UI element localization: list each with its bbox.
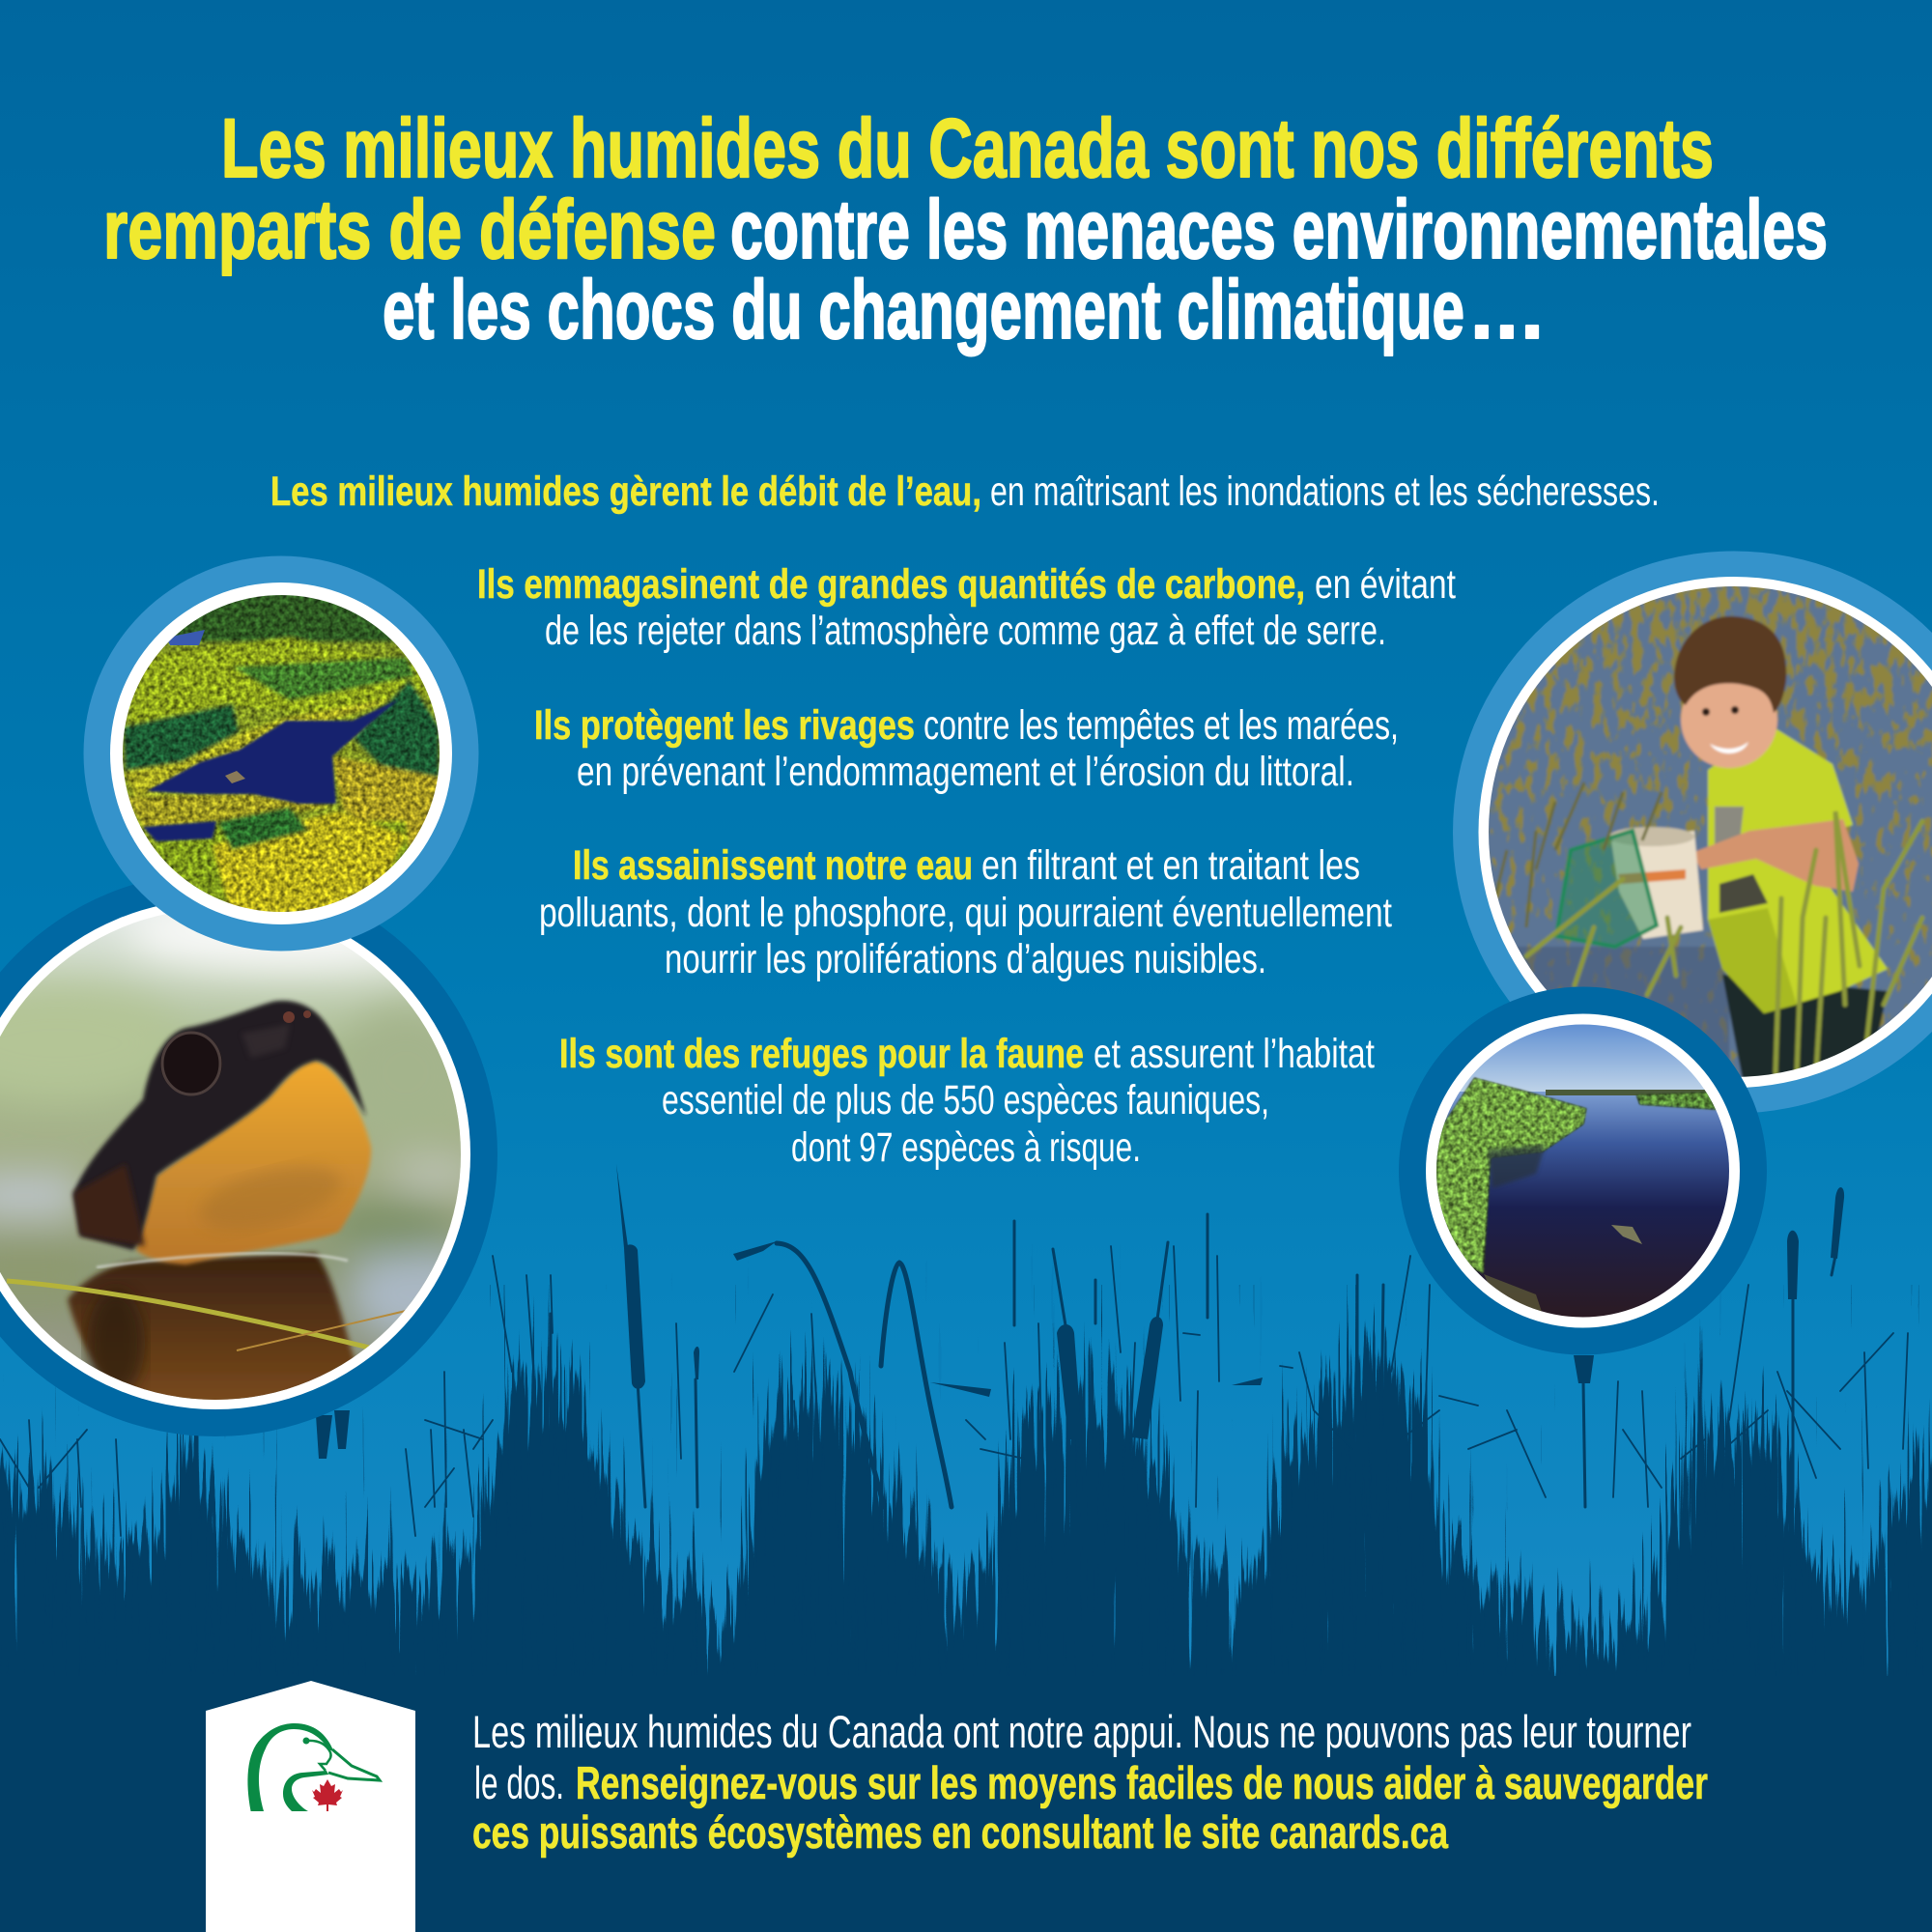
text: carbon — [477, 561, 1456, 654]
title — [103, 102, 1828, 356]
logo panel — [206, 1681, 415, 1932]
text: shorelines: contre les tempêtes et les marées, — [923, 702, 1399, 749]
text: clean water: nourrir les proliférations d’algues nuisibles. — [665, 936, 1266, 982]
arm — [1691, 819, 1859, 892]
bucket — [1611, 831, 1703, 939]
reflection — [68, 1253, 355, 1406]
footer call to action — [472, 1706, 1708, 1858]
water reeds — [1526, 811, 1922, 1072]
shirt — [1708, 725, 1888, 1013]
footer call to action: le dos. — [474, 1757, 564, 1808]
reed silhouette — [0, 1164, 1932, 1932]
icon: duck head logo — [247, 1723, 380, 1811]
photo circle: turtle — [0, 872, 497, 1436]
photo circle: calm pond — [1399, 987, 1767, 1354]
text: wildlife: essentiel de plus de 550 espèces fauniques, — [662, 1077, 1269, 1123]
text: water flow — [270, 469, 1660, 515]
text: shorelines — [534, 702, 1399, 795]
text: water flow: en maîtrisant les inondations et les sécheresses. — [990, 469, 1660, 515]
text: clean water: polluants, dont le phosphore, qui pourraient éventuellement — [539, 890, 1392, 936]
text: carbon: en évitant — [1315, 561, 1456, 608]
text: wildlife: et assurent l’habitat — [1094, 1031, 1375, 1077]
cattails and reed stems — [316, 1164, 1844, 1459]
chin — [136, 1061, 371, 1264]
head — [1681, 671, 1777, 768]
title: remparts de défense — [103, 184, 716, 276]
text: carbon: Ils emmagasinent de grandes quantités de carbone, — [477, 561, 1305, 608]
text: water flow: Les milieux humides gèrent le débit de l’eau, — [270, 469, 981, 515]
text: wildlife — [559, 1031, 1375, 1171]
photo circle: aerial view of wetland — [83, 556, 479, 951]
head — [73, 1001, 366, 1250]
photo circle: boy with net and bucket — [1453, 551, 1932, 1113]
text: wildlife: Ils sont des refuges pour la faune — [559, 1031, 1084, 1077]
text: carbon: de les rejeter dans l’atmosphère comme gaz à effet de serre. — [545, 608, 1386, 654]
text: clean water: en filtrant et en traitant les — [981, 842, 1360, 889]
text: shorelines: Ils protègent les rivages — [534, 702, 915, 749]
net — [1556, 831, 1657, 947]
text: shorelines: en prévenant l’endommagement et l’érosion du littoral. — [577, 749, 1354, 795]
text: wildlife: dont 97 espèces à risque. — [791, 1124, 1141, 1171]
title: et les chocs du changement climatique — [383, 264, 1464, 356]
title: . . . — [1470, 264, 1544, 356]
text: clean water — [539, 842, 1392, 982]
text: clean water: Ils assainissent notre eau — [573, 842, 973, 889]
footer call to action: ces puissants écosystèmes en consultant le site canards.ca — [472, 1806, 1449, 1858]
